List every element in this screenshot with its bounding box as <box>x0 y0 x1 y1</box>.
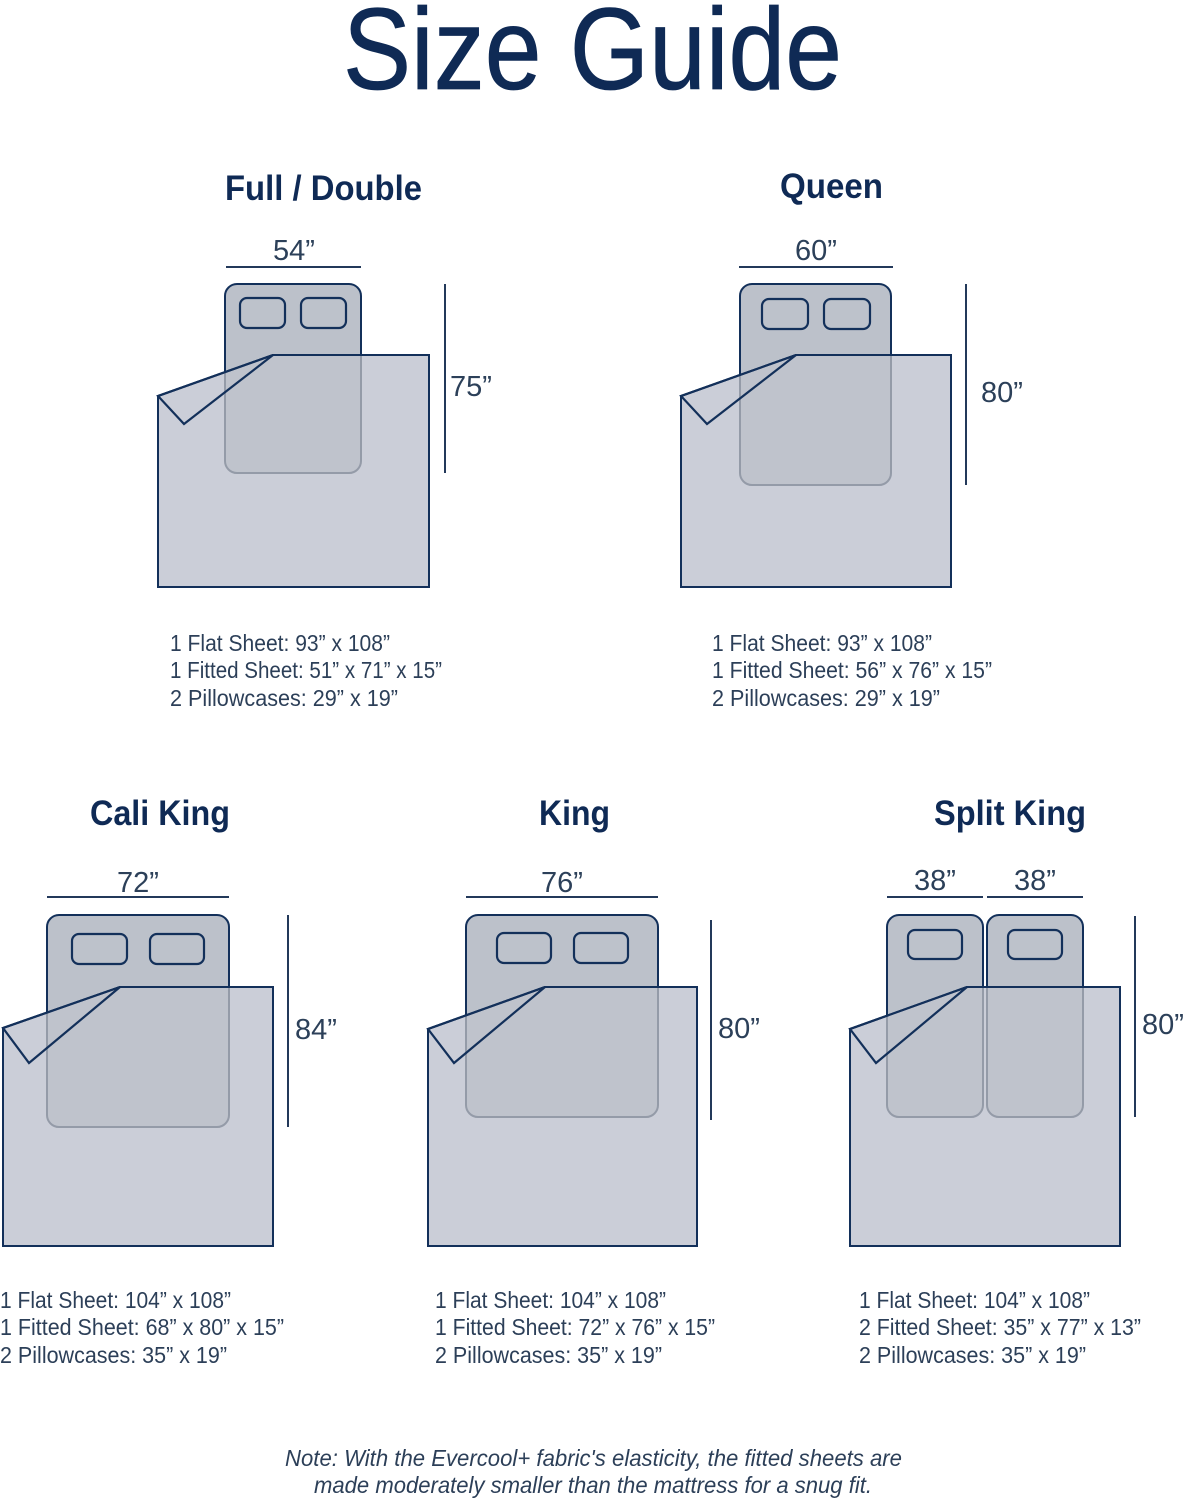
sheet specs: full: 1 Flat Sheet: 93” x 108” <box>170 630 390 656</box>
bed diagram: full <box>158 284 429 587</box>
sheet specs: cali king: 1 Fitted Sheet: 68” x 80” x 15” <box>0 1314 284 1340</box>
width dimension: 38 inches left: 38” <box>914 865 956 897</box>
height dimension: 84 inches: 84” <box>295 1014 337 1046</box>
sheet specs: king <box>435 1287 715 1368</box>
sheet specs: queen: 2 Pillowcases: 29” x 19” <box>712 685 940 711</box>
width dimension: 38 inches right: 38” <box>1014 865 1056 897</box>
note: made moderately smaller than the mattress for a snug fit. <box>314 1472 872 1498</box>
sheet specs: full <box>170 630 442 711</box>
heading: cali king: Cali King <box>90 794 230 833</box>
sheet specs: split king: 1 Flat Sheet: 104” x 108” <box>859 1287 1090 1313</box>
heading: queen: Queen <box>780 167 883 206</box>
panel: split king <box>850 794 1184 1368</box>
width dimension: 38 inches left <box>887 865 983 897</box>
panel: full / double <box>158 169 492 711</box>
sheet specs: cali king <box>0 1287 284 1368</box>
heading: split king: Split King <box>934 794 1086 833</box>
bed diagram: queen <box>681 284 951 587</box>
height dimension: 80 inches: 80” <box>981 377 1023 409</box>
height dimension: 75 inches: 75” <box>450 371 492 403</box>
sheet specs: full: 2 Pillowcases: 29” x 19” <box>170 685 398 711</box>
sheet specs: queen <box>712 630 992 711</box>
sheet specs: cali king: 1 Flat Sheet: 104” x 108” <box>0 1287 231 1313</box>
width dimension: 38 inches right <box>987 865 1083 897</box>
heading: king: King <box>539 794 610 833</box>
panel: queen <box>681 167 1023 711</box>
width dimension: 60 inches: 60” <box>795 235 837 267</box>
height dimension: 80 inches: 80” <box>1142 1009 1184 1041</box>
width dimension: 54 inches <box>226 235 361 267</box>
sheet specs: full: 1 Fitted Sheet: 51” x 71” x 15” <box>170 657 442 683</box>
note <box>285 1445 902 1498</box>
width dimension: 76 inches: 76” <box>541 867 583 899</box>
height dimension: 80 inches: 80” <box>718 1013 760 1045</box>
sheet specs: king: 1 Flat Sheet: 104” x 108” <box>435 1287 666 1313</box>
sheet specs: king: 1 Fitted Sheet: 72” x 76” x 15” <box>435 1314 715 1340</box>
sheet specs: queen: 1 Fitted Sheet: 56” x 76” x 15” <box>712 657 992 683</box>
width dimension: 72 inches: 72” <box>117 867 159 899</box>
sheet specs: split king: 2 Pillowcases: 35” x 19” <box>859 1342 1086 1368</box>
panel: king <box>428 794 760 1368</box>
sheet specs: split king: 2 Fitted Sheet: 35” x 77” x 13” <box>859 1314 1141 1340</box>
sheet specs: queen: 1 Flat Sheet: 93” x 108” <box>712 630 932 656</box>
bed diagram: king <box>428 915 697 1246</box>
note: Note: With the Evercool+ fabric's elasticity, the fitted sheets are <box>285 1445 902 1471</box>
sheet specs: split king <box>859 1287 1141 1368</box>
sheet specs: cali king: 2 Pillowcases: 35” x 19” <box>0 1342 227 1368</box>
bed diagram: cali king <box>3 915 273 1246</box>
bed diagram: split king <box>850 915 1120 1246</box>
width dimension: 54 inches: 54” <box>273 235 315 267</box>
heading: full / double: Full / Double <box>225 169 422 208</box>
panel: cali king <box>0 794 337 1368</box>
sheet specs: king: 2 Pillowcases: 35” x 19” <box>435 1342 662 1368</box>
